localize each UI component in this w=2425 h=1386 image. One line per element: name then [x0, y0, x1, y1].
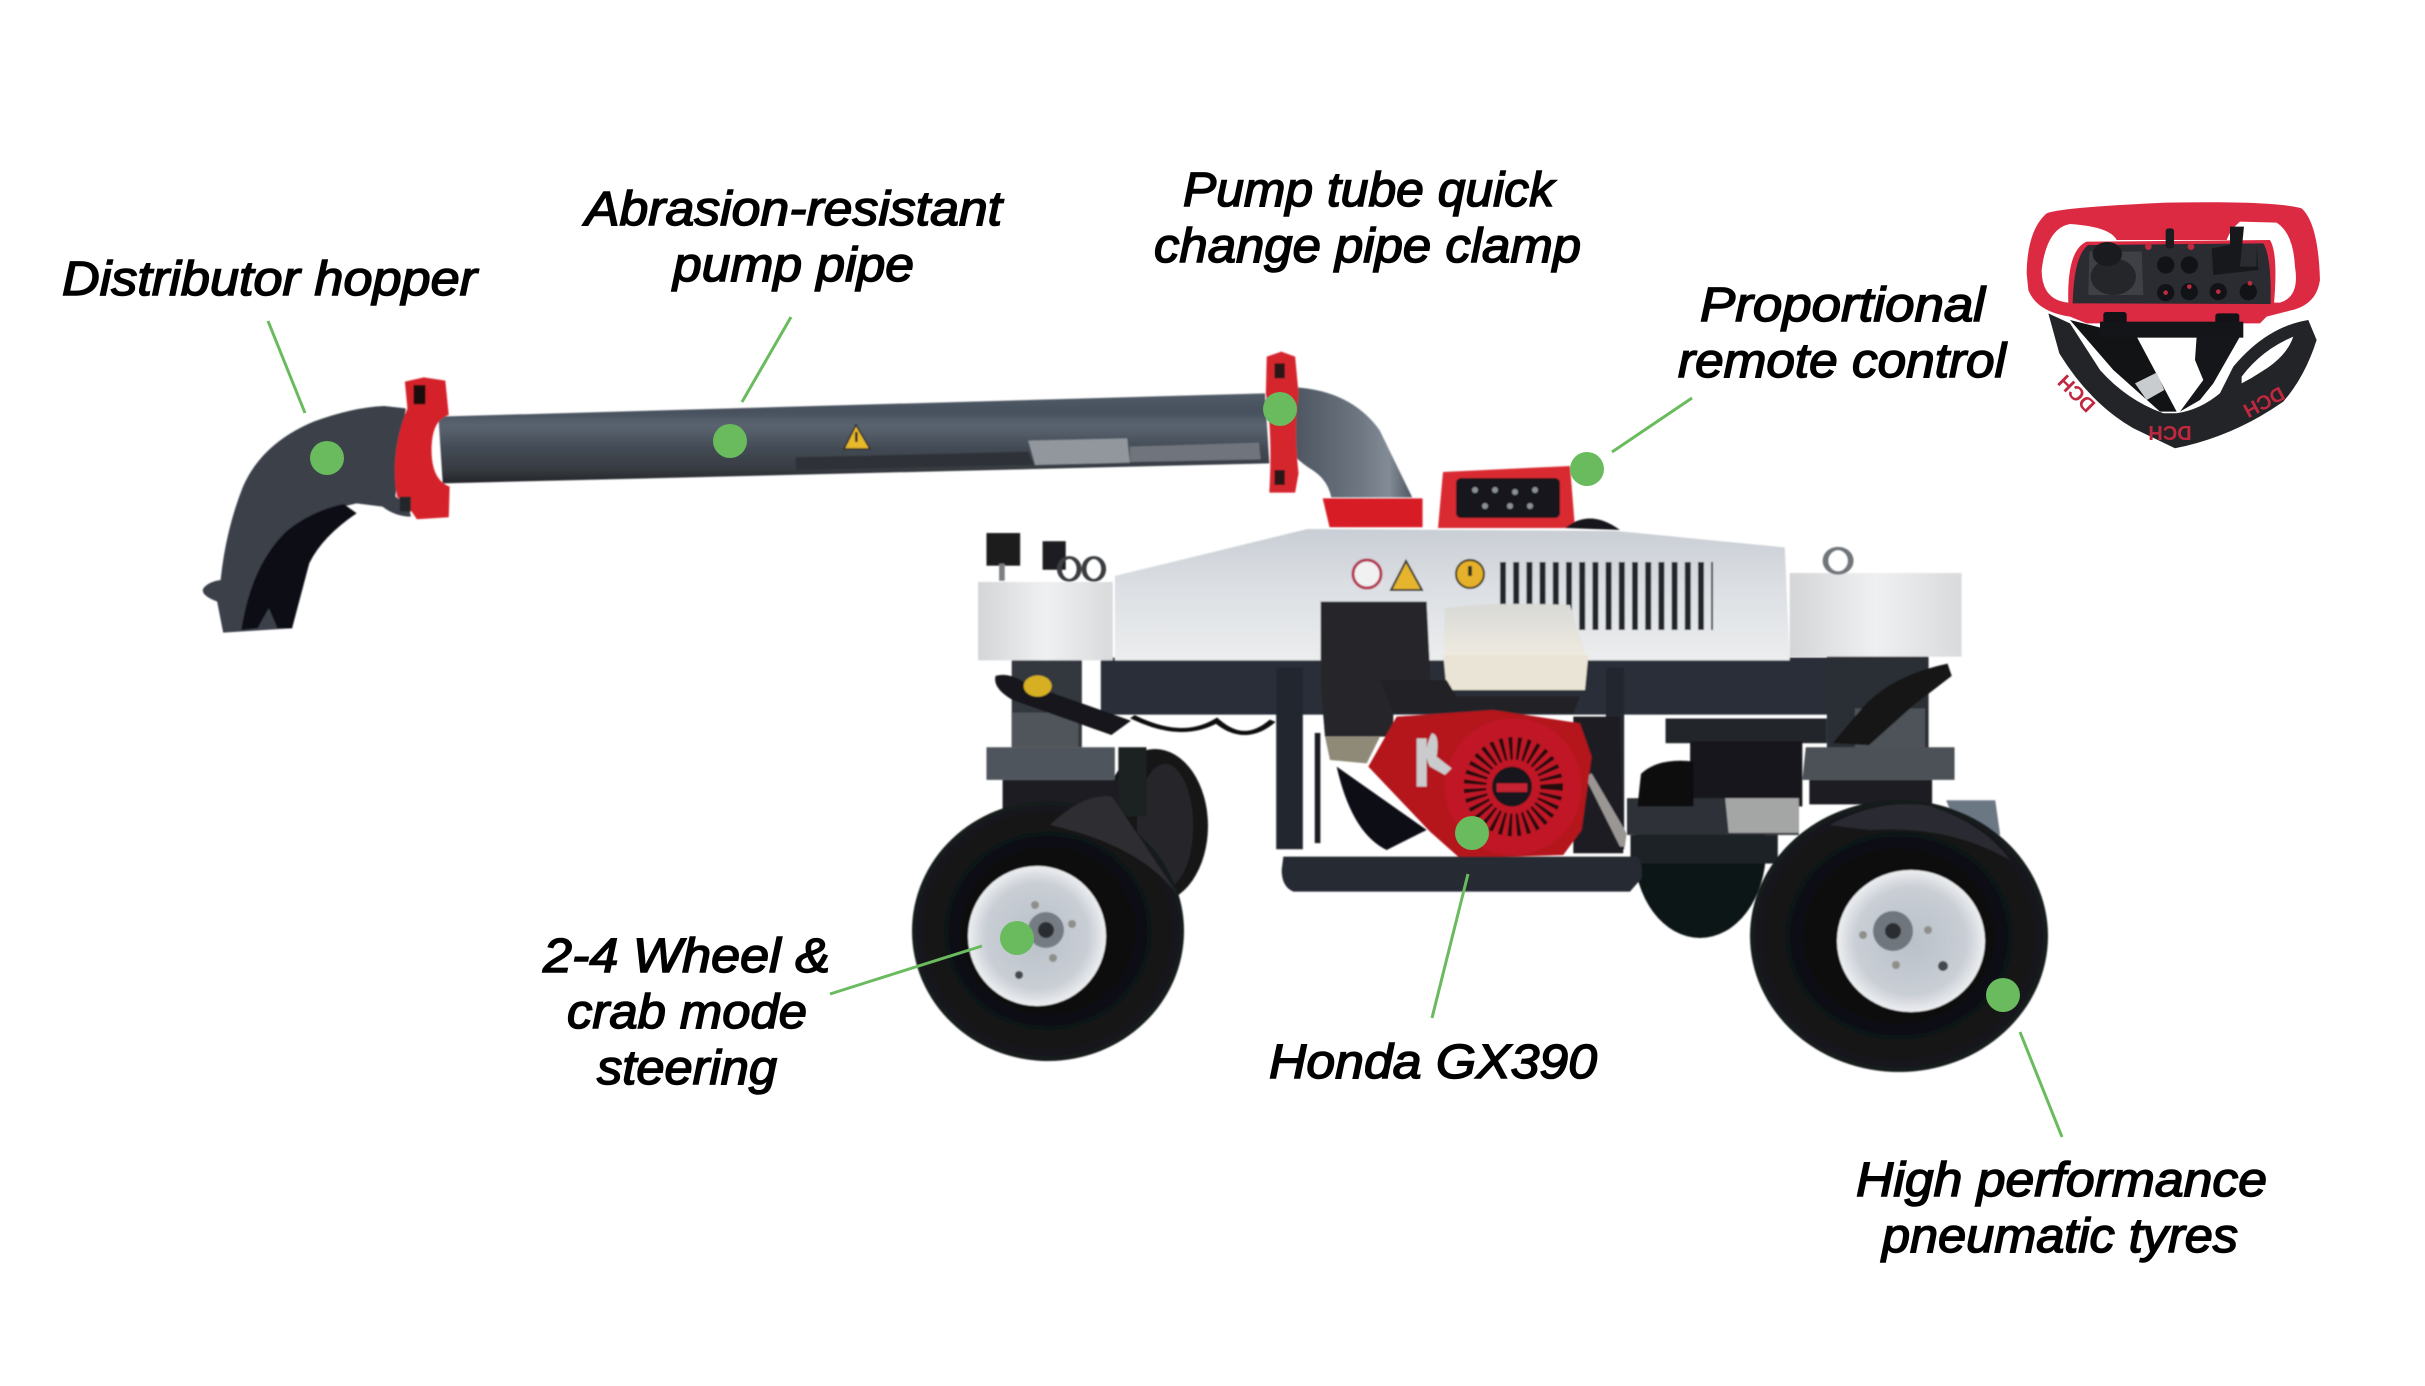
- safety stickers: [1353, 560, 1484, 590]
- rear tyres: [1102, 749, 1766, 938]
- shoulder strap: DCH: [2054, 370, 2100, 416]
- callout: high performance pneumatic tyres: High performance: [1856, 1154, 2267, 1207]
- front right wheel hub: [1837, 870, 1985, 1012]
- starter handle: [1417, 733, 1452, 787]
- callout: Honda GX390: [1269, 816, 1597, 1089]
- red grip frame: [2027, 202, 2320, 323]
- recoil fan cover: [1445, 718, 1582, 855]
- suspension brackets and hoses: [986, 664, 1955, 817]
- Honda GX390 engine: [1282, 602, 1642, 892]
- callout: steering modes: 2-4 Wheel &: [542, 930, 830, 983]
- warning sticker on pipe: [844, 425, 870, 449]
- ventilation slots: [1500, 562, 1713, 630]
- distributor hopper: [203, 406, 411, 633]
- callout: Honda GX390: Honda GX390: [1269, 1036, 1597, 1089]
- front left wheel hub: [968, 866, 1106, 1006]
- white body housing: [1115, 529, 1790, 660]
- abrasion-resistant pump pipe: [438, 393, 1269, 483]
- left white side box: [978, 582, 1113, 660]
- black engine cover: [1321, 602, 1431, 737]
- machine illustration: [203, 352, 2048, 1072]
- carburettor pipework: [1380, 680, 1580, 713]
- remote control product image: [2027, 202, 2320, 448]
- callout: abrasion-resistant pump pipe: [582, 183, 1004, 458]
- shoulder strap: DCH: [2239, 382, 2288, 421]
- callout: abrasion-resistant pump pipe: Abrasion-resistant: [582, 183, 1004, 236]
- callout: abrasion-resistant pump pipe: pump pipe: [671, 239, 914, 292]
- callout: steering modes: crab mode: [567, 986, 807, 1039]
- mounted remote control: [1438, 466, 1620, 530]
- front right tyre: [1750, 800, 2048, 1072]
- exhaust pipe: [1585, 773, 1627, 847]
- callout: high performance pneumatic tyres: [1856, 978, 2267, 1263]
- callout: pump tube quick change pipe clamp: change pipe clamp: [1154, 220, 1581, 273]
- toggle switches: [2157, 256, 2257, 301]
- callout: proportional remote control: [1570, 279, 2007, 486]
- carburettor detail: [1325, 737, 1380, 763]
- engine pulley: [1337, 767, 1427, 850]
- front left tyre: [912, 796, 1184, 1061]
- callout: pump tube quick change pipe clamp: [1154, 164, 1581, 426]
- callout: distributor hopper: Distributor hopper: [62, 253, 479, 306]
- underbody details: [1627, 719, 2000, 864]
- dark engine surround: [1573, 717, 1623, 853]
- rocker lever: [2212, 227, 2258, 275]
- dark chassis frame: [1012, 656, 1929, 749]
- callout: proportional remote control: Proportional: [1700, 279, 1986, 332]
- engine support posts: [1276, 668, 1624, 849]
- air filter tank: [1443, 604, 1588, 690]
- shoulder strap: [2048, 313, 2317, 448]
- right white side box: [1790, 573, 1962, 657]
- red pipe base coupling: [1323, 498, 1423, 527]
- callout: proportional remote control: remote control: [1678, 335, 2007, 388]
- control panel: [2068, 227, 2275, 304]
- callout: steering modes: steering: [597, 1042, 777, 1095]
- callout: pump tube quick change pipe clamp: Pump tube quick: [1183, 164, 1557, 217]
- pipe bend: [1295, 387, 1412, 497]
- frame hinges: [2100, 312, 2243, 338]
- callout: high performance pneumatic tyres: pneumatic tyres: [1880, 1210, 2238, 1263]
- quick change pipe clamp: [1266, 352, 1299, 493]
- callout: distributor hopper: [62, 253, 479, 475]
- shoulder strap: DCH: [2148, 421, 2192, 443]
- red engine body: [1368, 710, 1592, 858]
- handles and lifting rings: [986, 533, 1851, 581]
- joystick: [2088, 252, 2143, 295]
- callout: steering modes: [542, 921, 1034, 1095]
- engine mounting base: [1282, 857, 1642, 892]
- hopper pipe clamp: [395, 377, 450, 519]
